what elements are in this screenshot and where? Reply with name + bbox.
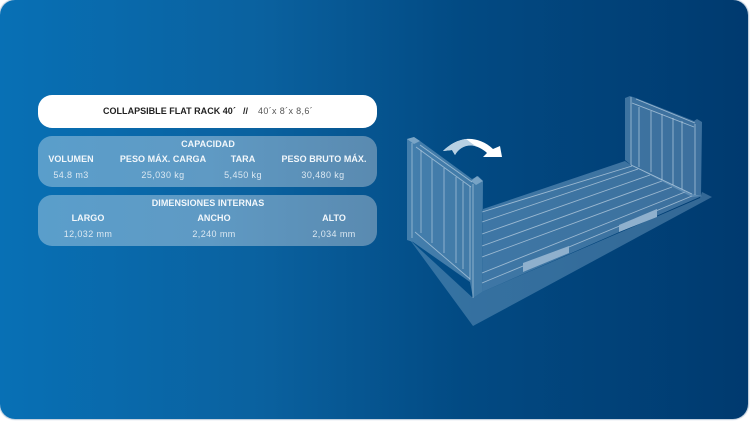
rear end wall (625, 96, 702, 197)
floor slats (482, 166, 692, 283)
lifting pad front (523, 246, 569, 272)
value: tara: 5,450 kg (224, 170, 262, 180)
column: largo label: LARGO (72, 213, 104, 223)
panel: capacidad (38, 136, 377, 187)
value: largo: 12,032 mm (64, 229, 112, 239)
title bar (38, 95, 377, 128)
size text: 40´x 8´x 8,6´ (258, 106, 313, 116)
column: peso max carga label: PESO MÁX. CARGA (120, 154, 206, 164)
heading: dimensiones internas: DIMENSIONES INTERNAS (152, 198, 264, 208)
front collapsed end wall (407, 137, 483, 298)
panel: dimensiones internas (38, 195, 377, 246)
column: alto label: ALTO (322, 213, 346, 223)
value: ancho: 2,240 mm (192, 229, 236, 239)
column: peso bruto label: PESO BRUTO MÁX. (281, 154, 367, 164)
ground shadow (410, 192, 712, 326)
column: tara label: TARA (231, 154, 255, 164)
container floor (482, 161, 702, 292)
value: peso max carga: 25,030 kg (141, 170, 185, 180)
lifting pad rear (619, 209, 657, 232)
column: ancho label: ANCHO (197, 213, 231, 223)
arrow: fold direction (443, 139, 502, 157)
value: alto: 2,034 mm (312, 229, 356, 239)
title text: COLLAPSIBLE FLAT RACK 40´ (103, 106, 236, 116)
value: peso bruto: 30,480 kg (301, 170, 345, 180)
column: volumen label: VOLUMEN (48, 154, 94, 164)
container drawing (407, 96, 712, 326)
heading: capacidad: CAPACIDAD (181, 139, 235, 149)
value: volumen: 54.8 m3 (53, 170, 89, 180)
separator: // (243, 106, 248, 116)
